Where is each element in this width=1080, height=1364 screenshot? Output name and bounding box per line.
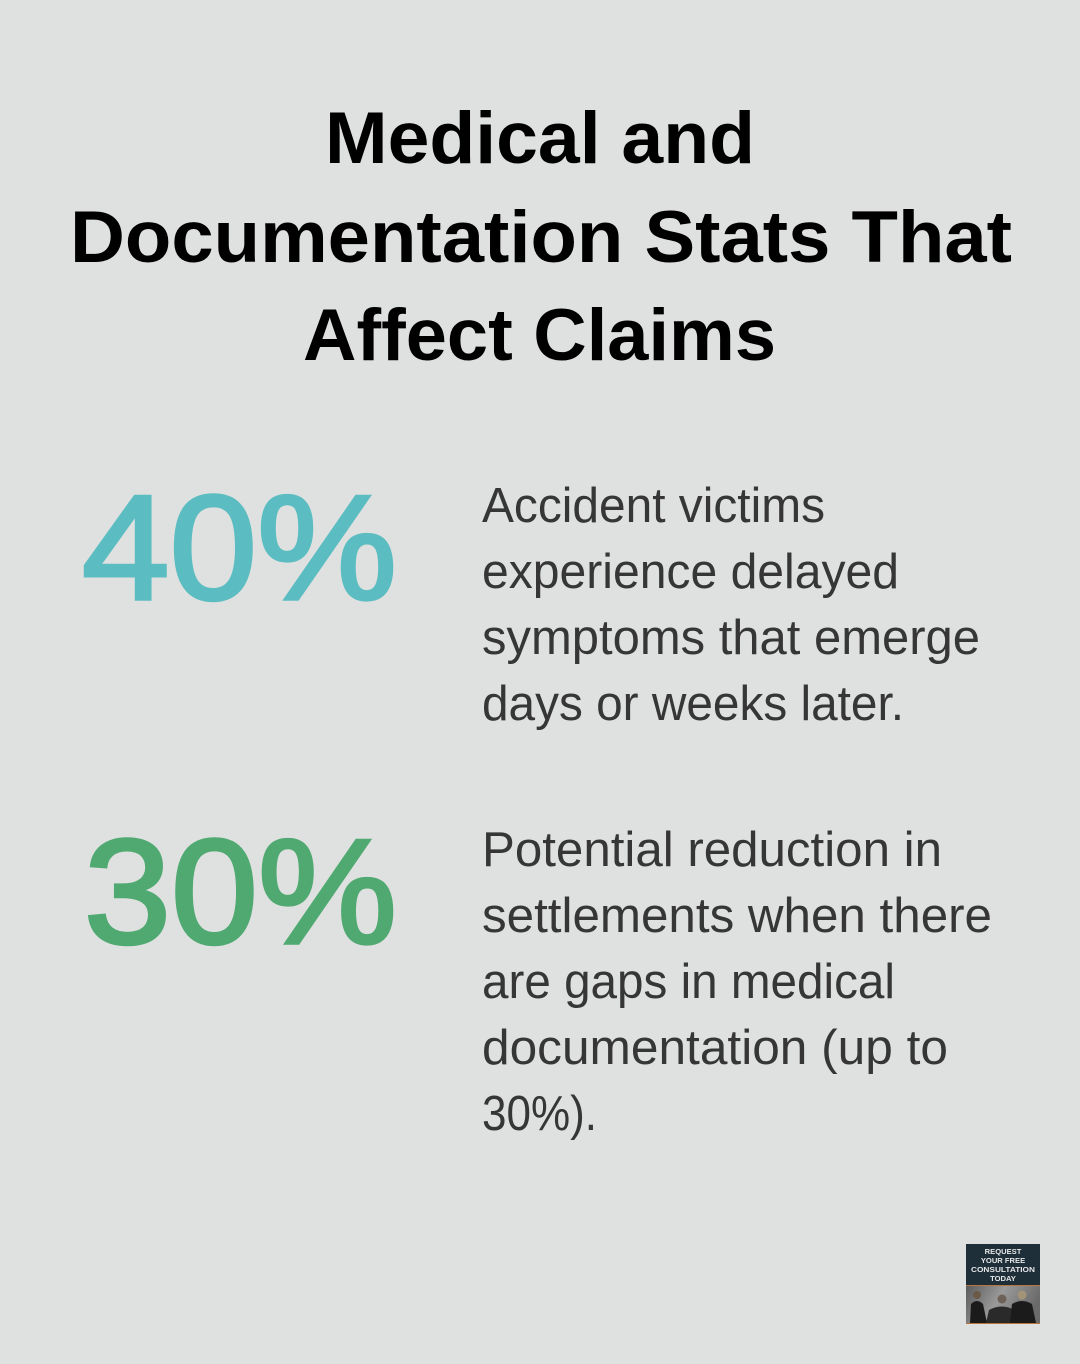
text: delayed symptoms description: days or weeks later. [482,677,904,731]
stat: 30%: 30% [84,808,397,975]
title: Medical and [325,98,755,179]
title: Documentation Stats That [70,197,1012,278]
badge: request free consultation: CONSULTATION [971,1265,1035,1274]
text: settlement reduction description: Potential reduction in [482,823,942,877]
text: delayed symptoms description: Accident victims [482,479,825,533]
text: settlement reduction description: settlements when there [482,889,992,943]
badge: request free consultation: TODAY [990,1274,1016,1283]
title: Affect Claims [303,295,776,376]
stat: 40%: 40% [82,464,397,631]
text: settlement reduction description: are gaps in medical [482,955,895,1009]
text: settlement reduction description: 30%). [482,1087,597,1141]
text: delayed symptoms description: experience delayed [482,545,899,599]
badge: request free consultation: YOUR FREE [981,1256,1025,1265]
text: delayed symptoms description: symptoms that emerge [482,611,980,665]
text: settlement reduction description [482,823,992,1141]
text: delayed symptoms description [482,479,980,731]
text: settlement reduction description: documentation (up to [482,1021,948,1075]
badge: request free consultation: REQUEST [985,1247,1022,1256]
title [70,98,1012,376]
badge: request free consultation [966,1244,1040,1324]
